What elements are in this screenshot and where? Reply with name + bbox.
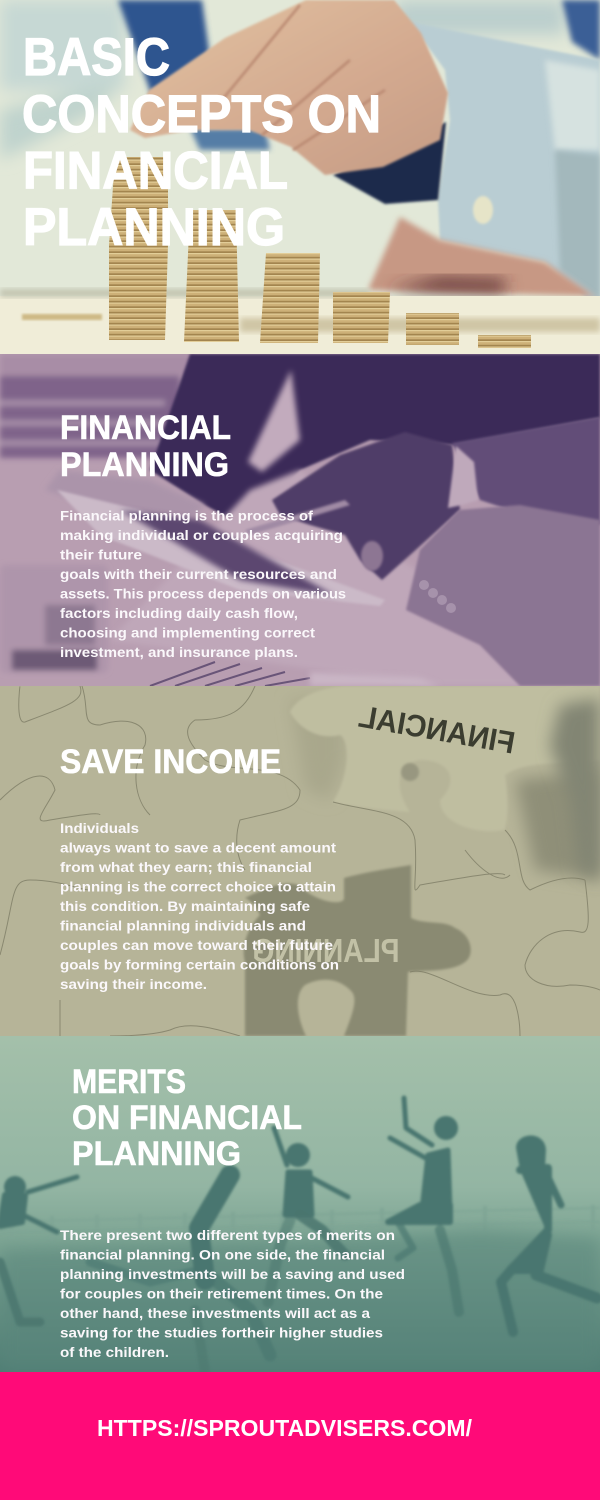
table: [0, 296, 600, 354]
water glass: [0, 565, 108, 673]
child 2: [90, 1175, 270, 1372]
lifted puzzle piece: [290, 686, 600, 831]
child 3: [268, 1128, 348, 1302]
left hand on tablet: [49, 472, 206, 517]
child 5: [501, 1136, 597, 1332]
body text: There present two different types of merits on: [60, 1227, 395, 1243]
grass: [2, 1228, 600, 1302]
body text: [60, 820, 339, 992]
title: PLANNING: [23, 198, 285, 257]
puzzle outlines: [0, 686, 600, 1036]
hand: [130, 0, 448, 175]
body text: planning is the correct choice to attain: [60, 878, 336, 894]
body text: factors including daily cash flow,: [60, 605, 298, 621]
child 1: [0, 1176, 77, 1322]
dark jacket: [150, 354, 600, 530]
heading: PLANNING: [72, 1135, 241, 1173]
heading: PLANNING: [60, 446, 229, 484]
website url: HTTPS://SPROUTADVISERS.COM/: [97, 1415, 473, 1441]
heading: SAVE INCOME: [60, 743, 281, 781]
body text: couples can move toward their future: [60, 937, 333, 953]
shirt button: [473, 196, 493, 224]
panel: hero photo with title: [0, 0, 600, 354]
body text: this condition. By maintaining safe: [60, 898, 310, 914]
body text: saving for the studies fortheir higher studies: [60, 1324, 383, 1340]
body text: always want to save a decent amount: [60, 840, 336, 856]
body text: making individual or couples acquiring: [60, 527, 343, 543]
title: CONCEPTS ON: [22, 85, 381, 144]
panel: merits on financial planning: [0, 1036, 600, 1372]
mirrored word: financial: FINANCIAL: [356, 699, 518, 761]
blurred office background: [0, 354, 195, 458]
mirrored word: planning: PLANNING: [252, 932, 400, 969]
body text: their future: [60, 546, 142, 562]
child 4: [388, 1098, 459, 1312]
title: BASIC: [23, 28, 170, 87]
fence: [484, 1206, 595, 1212]
body text: from what they earn; this financial: [60, 859, 312, 875]
body text: financial planning. On one side, the financial: [60, 1246, 385, 1262]
body text: Individuals: [60, 820, 139, 836]
cuff sleeve: [406, 505, 600, 686]
body text: [60, 1227, 405, 1360]
running children silhouettes: [0, 1098, 597, 1372]
heading: FINANCIAL: [60, 409, 231, 447]
sleeve buttons: [419, 580, 456, 613]
body text: financial planning individuals and: [60, 918, 306, 934]
heading: MERITS: [72, 1063, 186, 1101]
body text: [60, 508, 346, 660]
upper sleeve: [452, 417, 600, 525]
body text: saving their income.: [60, 976, 207, 992]
puzzle shading: [296, 725, 342, 792]
title: FINANCIAL: [23, 142, 288, 200]
body text: of the children.: [60, 1344, 169, 1360]
missing puzzle hole: [244, 865, 471, 1036]
coin stacks: [109, 157, 531, 348]
heading: [60, 409, 231, 484]
body text: for couples on their retirement times. On the: [60, 1286, 383, 1302]
hand holding piece: [550, 698, 600, 880]
forearm: [368, 217, 600, 300]
heading: [72, 1063, 302, 1173]
body text: Financial planning is the process of: [60, 508, 313, 524]
body text: planning investments will be a saving and used: [60, 1266, 405, 1282]
title: [22, 28, 381, 257]
dark shadow under hand: [333, 122, 446, 204]
body text: goals with their current resources and: [60, 566, 337, 582]
panel: financial planning: [0, 354, 600, 686]
pointing hand: [272, 432, 460, 580]
tablet: [57, 490, 385, 606]
body text: goals by forming certain conditions on: [60, 956, 339, 972]
body text: investment, and insurance plans.: [60, 644, 298, 660]
body text: choosing and implementing correct: [60, 624, 315, 640]
heading: ON FINANCIAL: [72, 1099, 302, 1137]
body text: assets. This process depends on various: [60, 586, 346, 602]
table paper: [120, 467, 514, 683]
paper chart lines: [150, 662, 310, 686]
shirt cuff: [419, 27, 600, 296]
panel: save income: [0, 686, 600, 1036]
body text: other hand, these investments will act as a: [60, 1305, 370, 1321]
panel: footer: [0, 1372, 600, 1500]
